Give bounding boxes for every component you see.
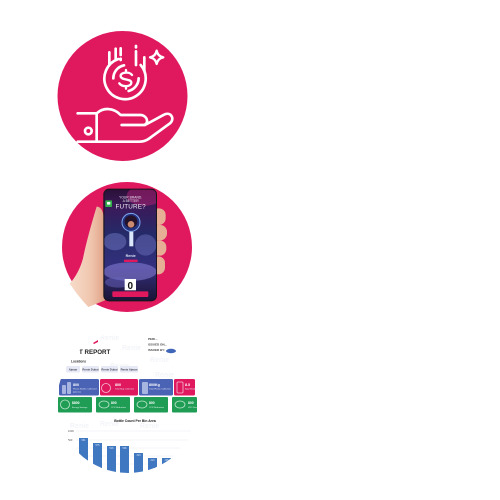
stat cards: top row: (pieces) bbox=[73, 392, 81, 394]
icon: pink circle with coin dropping into hand bbox=[58, 31, 188, 161]
stat cards: top row bbox=[59, 379, 197, 396]
stat cards: green row: H2O Saved bbox=[188, 407, 200, 409]
stat cards: top row: Total Plastic Collected bbox=[149, 388, 171, 390]
panel: report screenshot in circle bbox=[57, 331, 200, 474]
stat cards: top row: Plastic Bottles Collected bbox=[73, 388, 97, 390]
watermark text: Renie bbox=[150, 357, 169, 364]
stat cards: top row: 8.5 bbox=[185, 383, 190, 387]
logo flash bbox=[93, 340, 98, 344]
stat cards: top row: 800 bbox=[115, 383, 121, 387]
stat cards: green row: 800 bbox=[149, 401, 155, 405]
stat cards: green row: CO2 Reduction bbox=[149, 406, 165, 409]
hand palm bbox=[70, 207, 105, 307]
illustration: hand holding phone bbox=[70, 186, 167, 307]
stat cards: green row: CO2 Reduction bbox=[111, 406, 127, 409]
icon: coin and hand line art bbox=[78, 46, 172, 142]
watermark text bbox=[70, 335, 174, 430]
location pills bbox=[66, 366, 138, 372]
brand name: Renie bbox=[126, 254, 136, 258]
watermark text: Renie bbox=[110, 363, 129, 370]
logo badge bbox=[105, 200, 112, 207]
stat cards: green row: 800 bbox=[111, 401, 117, 405]
bar chart: bottle count per bin area: 205 bbox=[164, 459, 169, 462]
location pills: Renie Dubai bbox=[101, 367, 118, 371]
stat cards: top row: 800Kg bbox=[149, 383, 160, 387]
bar chart: bottle count per bin area: 661 bbox=[82, 439, 86, 442]
phone screen bbox=[104, 190, 156, 300]
stat cards: green row: 800 bbox=[188, 401, 194, 405]
location pills: Renie Ajman bbox=[121, 367, 138, 371]
phone body bbox=[103, 189, 157, 301]
watermark text: Renie bbox=[100, 335, 119, 342]
location pills: Ajman bbox=[69, 367, 78, 371]
screen headline: YOUR BRAND. bbox=[119, 195, 142, 199]
bar chart: bottle count per bin area bbox=[68, 419, 191, 474]
bar chart: bottle count per bin area: 508 bbox=[122, 447, 127, 450]
bar chart: bottle count per bin area: 313 bbox=[136, 454, 141, 457]
stat cards: top row: Total Bag Collected bbox=[115, 388, 135, 390]
watermark text: Renie bbox=[70, 423, 89, 430]
watermark text: Renie bbox=[155, 372, 174, 379]
counter bbox=[125, 279, 136, 290]
watermark text: Renie bbox=[122, 345, 141, 352]
bar chart: bottle count per bin area: 500 bbox=[68, 438, 73, 442]
icon: pink circle behind phone bbox=[62, 182, 192, 312]
bar chart: bottle count per bin area: 1000 bbox=[68, 429, 74, 433]
report meta: ISSUED BY: bbox=[148, 348, 165, 352]
phone screen: A BETTER bbox=[123, 199, 139, 203]
watermark text: Renie bbox=[140, 423, 159, 430]
report meta: PERI... bbox=[148, 337, 158, 341]
phone screen: 0 bbox=[128, 281, 134, 292]
stat cards: green row: $800 bbox=[72, 401, 80, 405]
stat cards: top row: 800 bbox=[73, 383, 79, 387]
report meta bbox=[148, 338, 167, 351]
heading: T REPORT bbox=[79, 349, 111, 356]
phone screen: FUTURE? bbox=[115, 203, 146, 210]
sub heading: Locations bbox=[71, 360, 86, 364]
watermark text: Renie bbox=[100, 421, 119, 428]
bar chart: bottle count per bin area: 213 bbox=[150, 459, 155, 462]
pink button bbox=[112, 291, 148, 297]
stat cards: green row: Energy Savings bbox=[72, 406, 88, 409]
bar chart: bottle count per bin area: 516 bbox=[110, 447, 114, 450]
stat cards: green row bbox=[58, 397, 200, 412]
chart title: Bottle Count Per Bin Area bbox=[114, 419, 156, 423]
astronaut character bbox=[122, 213, 140, 246]
stat cards: top row: Bag Weight bbox=[185, 388, 197, 390]
report meta: ISSUED ON... bbox=[148, 342, 167, 346]
bar chart: bottle count per bin area: 575 bbox=[96, 444, 100, 447]
location pills: Renie Dubai bbox=[82, 367, 99, 371]
fingers bbox=[152, 208, 167, 274]
